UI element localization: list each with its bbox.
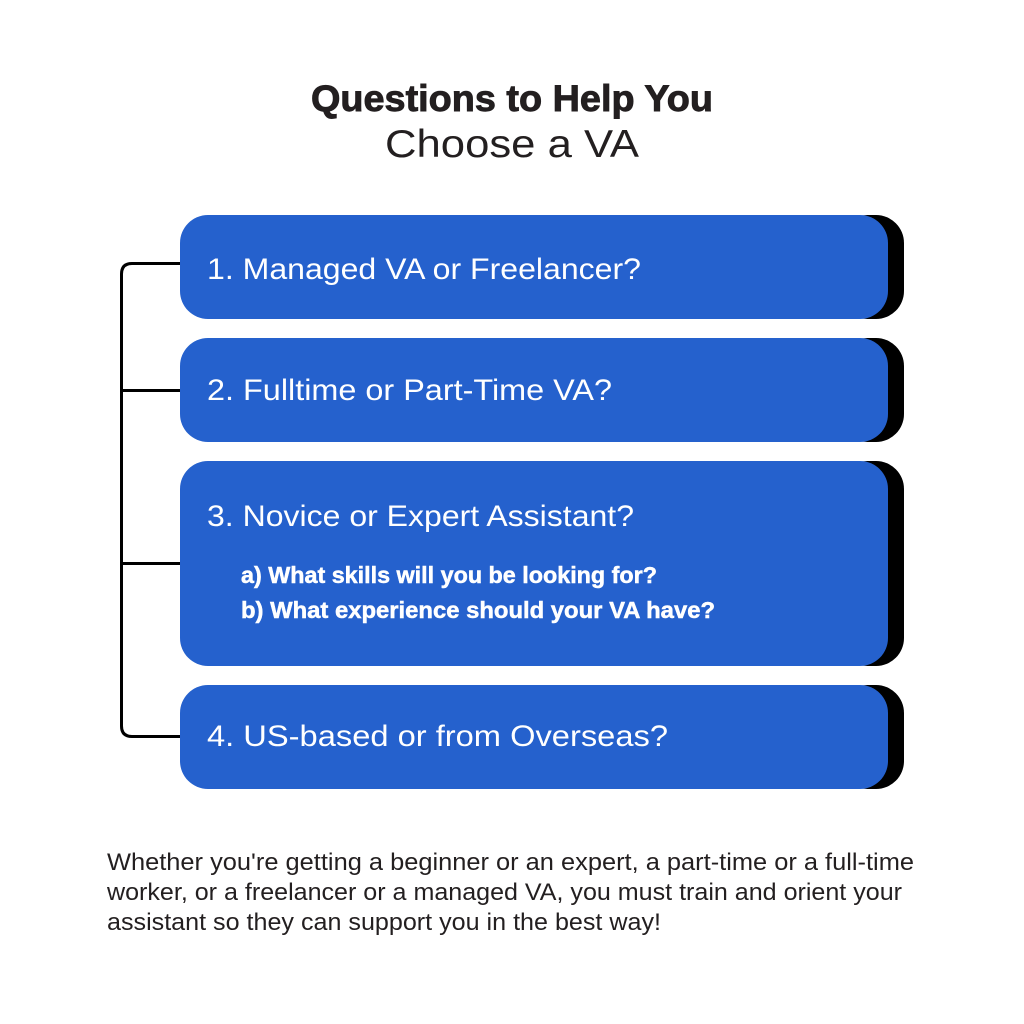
panel: question 2 xyxy=(180,338,904,442)
sub-question a: a) What skills will you be looking for? xyxy=(241,562,657,588)
title: Questions to Help You xyxy=(311,78,713,119)
panel: question 1: 1. Managed VA or Freelancer? xyxy=(207,253,641,286)
closing paragraph xyxy=(106,849,914,936)
closing paragraph: worker, or a freelancer or a managed VA, you must train and orient your xyxy=(106,879,902,906)
panel: question 4: 4. US-based or from Overseas? xyxy=(207,720,668,753)
panel: question 1 xyxy=(180,215,904,319)
title xyxy=(311,78,713,166)
connector bracket xyxy=(122,264,180,736)
title: Choose a VA xyxy=(385,123,639,166)
panel: question 3 xyxy=(180,461,904,666)
panel: question 4 xyxy=(180,685,904,789)
panel: question 2: 2. Fulltime or Part-Time VA? xyxy=(207,374,612,407)
sub-question b: b) What experience should your VA have? xyxy=(241,597,715,623)
panel: question 3: 3. Novice or Expert Assistant? xyxy=(207,500,634,533)
closing paragraph: assistant so they can support you in the best way! xyxy=(107,909,661,936)
closing paragraph: Whether you're getting a beginner or an expert, a part-time or a full-time xyxy=(107,849,914,876)
